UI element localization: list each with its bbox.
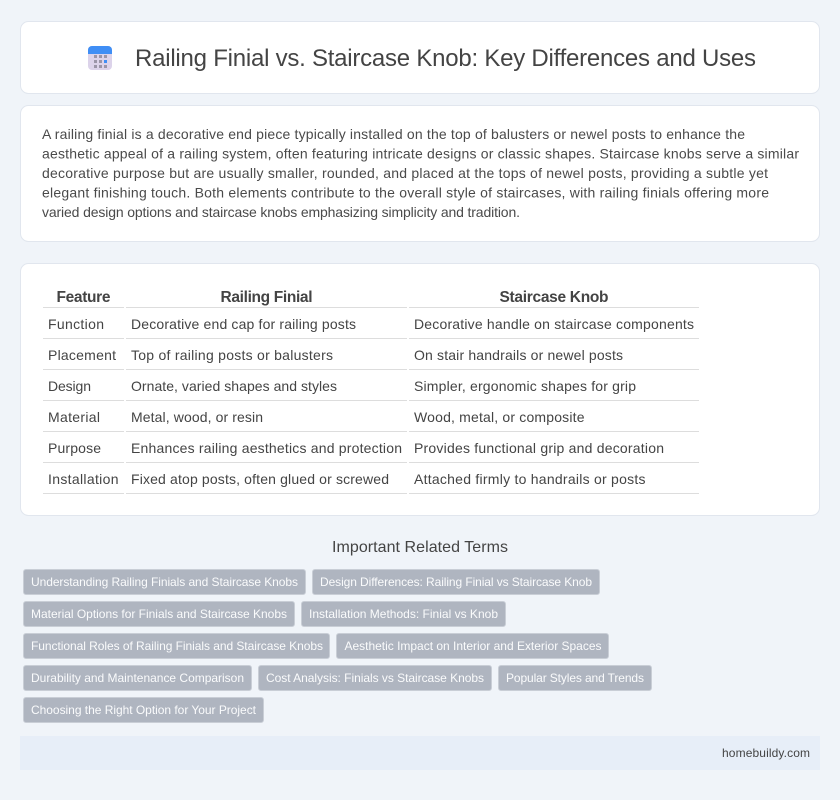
table row: installation: Attached firmly to handrails or posts	[414, 471, 646, 487]
tag	[24, 666, 252, 690]
table row: material: Wood, metal, or composite	[414, 409, 585, 425]
table row: purpose: Purpose	[48, 440, 101, 456]
table row: function	[48, 316, 694, 332]
table row: design: Simpler, ergonomic shapes for grip	[414, 378, 636, 394]
tag: Choosing the Right Option for Your Project	[31, 703, 257, 717]
table header	[56, 289, 608, 306]
table row: installation: Fixed atop posts, often glued or screwed	[131, 471, 389, 487]
tag	[498, 666, 652, 690]
text block: description: aesthetic appeal of a railing system, often featuring intricate designs or classic shapes. Staircase knobs serve a similar	[42, 146, 799, 162]
text block: description	[42, 126, 799, 220]
tag	[24, 698, 264, 722]
table row: placement: Top of railing posts or balusters	[131, 347, 333, 363]
tag	[24, 634, 330, 658]
related terms tags	[24, 570, 652, 722]
table row: design: Ornate, varied shapes and styles	[131, 378, 337, 394]
tag	[302, 602, 506, 626]
footer	[20, 736, 820, 770]
table row: placement	[48, 347, 623, 363]
tag: Design Differences: Railing Finial vs Staircase Knob	[320, 575, 592, 589]
table row: function: Function	[48, 316, 104, 332]
icon: calendar	[88, 46, 112, 70]
tag	[336, 634, 608, 658]
tag: Cost Analysis: Finials vs Staircase Knobs	[266, 671, 484, 685]
tag: Material Options for Finials and Staircase Knobs	[31, 607, 287, 621]
tag	[258, 666, 492, 690]
tag: Functional Roles of Railing Finials and Staircase Knobs	[31, 639, 323, 653]
tag: Installation Methods: Finial vs Knob	[309, 607, 498, 621]
tag: Aesthetic Impact on Interior and Exterior Spaces	[344, 639, 602, 653]
table row: design: Design	[48, 378, 91, 394]
footer text: homebuildy.com	[722, 746, 810, 760]
tag: Durability and Maintenance Comparison	[31, 671, 244, 685]
table row: purpose: Enhances railing aesthetics and protection	[131, 440, 402, 456]
heading: important related terms: Important Related Terms	[332, 539, 508, 556]
tag	[312, 570, 600, 594]
title: Railing Finial vs. Staircase Knob: Key Differences and Uses	[135, 45, 756, 72]
table row: function: Decorative end cap for railing posts	[131, 316, 356, 332]
panel: description	[20, 106, 820, 242]
tag	[24, 570, 306, 594]
text block: description: varied design options and staircase knobs emphasizing simplicity and tradition.	[42, 204, 520, 220]
tag: Understanding Railing Finials and Staircase Knobs	[31, 575, 298, 589]
tag	[24, 602, 294, 626]
table row: function: Decorative handle on staircase components	[414, 316, 694, 332]
text block: description: elegant finishing touch. Both elements contribute to the overall style of staircases, with railing finials offering more	[42, 184, 769, 200]
table row: material: Metal, wood, or resin	[131, 409, 263, 425]
panel: comparison table	[20, 264, 820, 516]
table row: design	[48, 378, 636, 394]
text block: description: A railing finial is a decorative end piece typically installed on the top of balusters or newel posts to enhance the	[42, 126, 745, 142]
table row: placement: Placement	[48, 347, 116, 363]
table row: purpose	[48, 440, 664, 456]
table row: installation: Installation	[48, 471, 118, 487]
text block: description: decorative purpose but are usually smaller, rounded, and placed at the tops of newel posts, providing a subtle yet	[42, 165, 768, 181]
table header: Railing Finial	[220, 289, 312, 306]
header card	[20, 22, 820, 94]
table row: installation	[48, 471, 646, 487]
table row: placement: On stair handrails or newel posts	[414, 347, 623, 363]
table row: material	[48, 409, 585, 425]
tag: Popular Styles and Trends	[506, 671, 644, 685]
table header: Staircase Knob	[500, 289, 608, 306]
table row: purpose: Provides functional grip and decoration	[414, 440, 664, 456]
table row: material: Material	[48, 409, 100, 425]
table header: Feature	[56, 289, 111, 306]
